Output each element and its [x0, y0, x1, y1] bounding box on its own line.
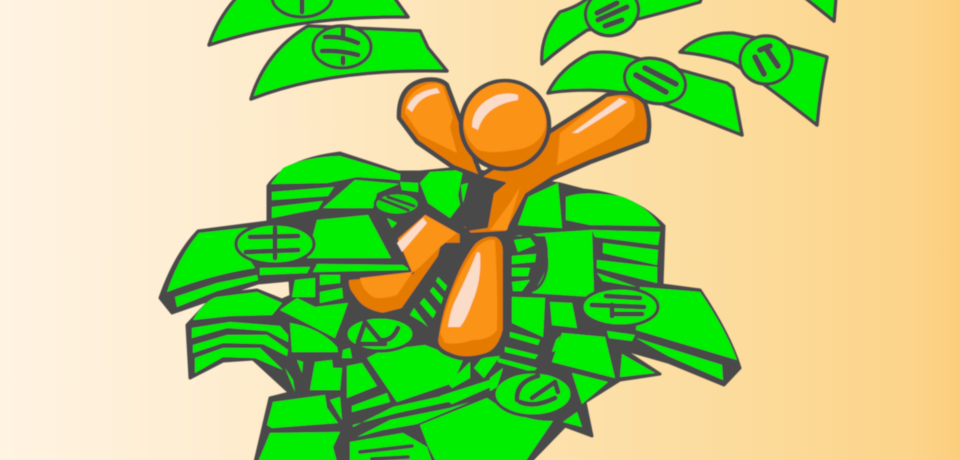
leg side stripes: [410, 277, 447, 327]
green bills in the pile: [167, 156, 737, 460]
stack: top left: [271, 156, 400, 218]
artwork: [160, 0, 836, 460]
bill: top left: [209, 0, 408, 45]
orange figure: [347, 80, 649, 359]
flying bills: [209, 0, 836, 135]
right leg: [436, 234, 505, 358]
bill circle: top centre: [375, 193, 419, 215]
head: [461, 81, 549, 169]
bill: centre right: [518, 183, 562, 228]
tie: [462, 177, 505, 230]
scrap: right of stack: [420, 170, 463, 218]
bill: bottom left: [267, 395, 338, 428]
bill: top centre right: [542, 0, 702, 64]
bill: large left: [167, 226, 262, 307]
bill: second left: [251, 26, 447, 99]
torso and right arm: [462, 93, 649, 235]
pile silhouette: [160, 153, 740, 460]
money pile: [160, 153, 740, 460]
bill: centre top left: [323, 180, 399, 208]
bill circle: centre left low: [346, 317, 414, 351]
stack: right top: [566, 194, 660, 226]
left arm: [399, 80, 482, 178]
bottom strips: [352, 393, 470, 437]
stack: lower left: [192, 292, 288, 373]
left leg and foot: [347, 212, 462, 315]
bill: above right hand: [548, 52, 742, 135]
centre left scraps: [292, 278, 315, 297]
bill: large right: [636, 287, 737, 360]
bill: bottom centre: [420, 398, 553, 460]
bill: right: [680, 33, 827, 125]
bill circle: centre right low: [494, 372, 572, 416]
bill: top right corner: [803, 0, 836, 21]
